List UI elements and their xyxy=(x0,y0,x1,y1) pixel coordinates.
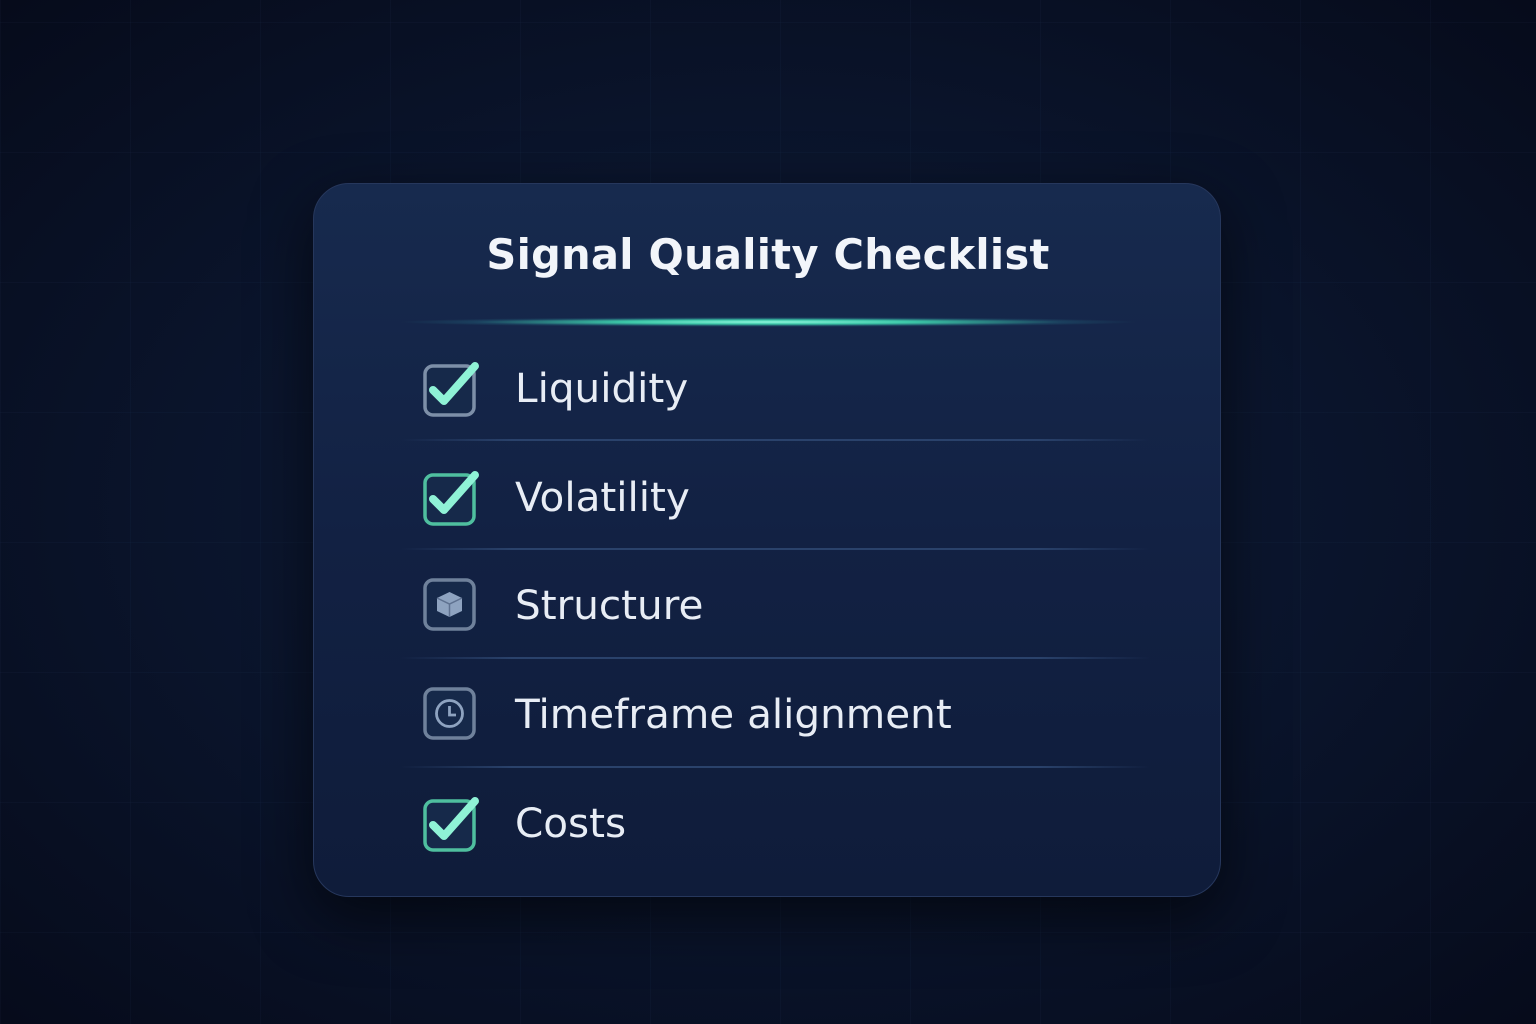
row: Timeframe alignment: Timeframe alignment xyxy=(515,690,952,738)
row: Structure: Structure xyxy=(515,581,703,629)
icon: checked box xyxy=(423,471,479,526)
row: Liquidity xyxy=(423,362,688,417)
icon: clock box xyxy=(423,687,476,740)
icon: checked box xyxy=(423,362,479,417)
row: Structure xyxy=(423,578,703,631)
title: Signal Quality Checklist xyxy=(486,230,1050,279)
icon: checked box xyxy=(423,797,479,852)
row: Volatility: Volatility xyxy=(515,473,690,521)
icon: cube box xyxy=(423,578,476,631)
row: Volatility xyxy=(423,471,690,526)
row: Costs: Costs xyxy=(515,799,626,847)
row: Costs xyxy=(423,797,626,852)
row: Liquidity: Liquidity xyxy=(515,364,688,412)
glow underline xyxy=(400,317,1136,327)
panel: checklist card xyxy=(313,183,1221,897)
